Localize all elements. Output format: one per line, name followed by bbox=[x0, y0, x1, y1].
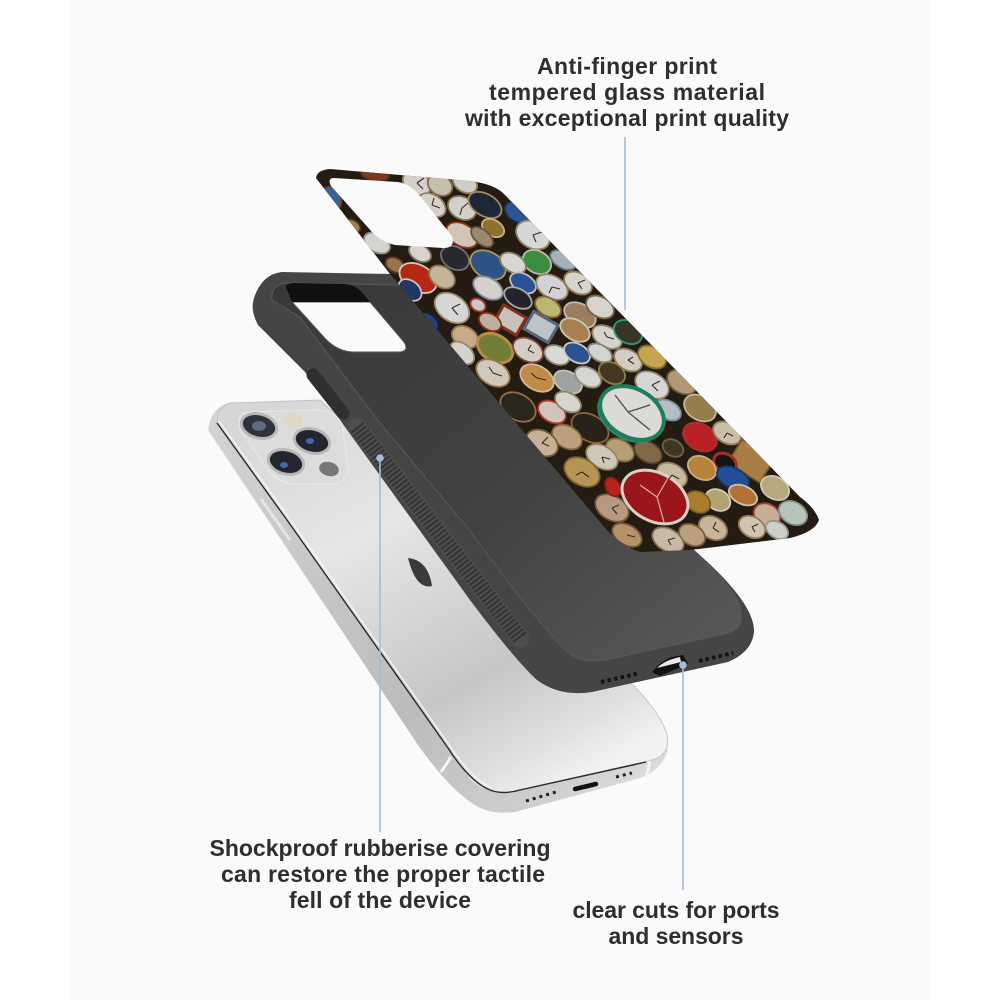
camera bump bbox=[239, 410, 348, 484]
sensor bbox=[318, 460, 340, 478]
case speaker holes right bbox=[699, 653, 733, 661]
flash bbox=[282, 411, 304, 429]
text: shockproof covering: can restore the proper tactile bbox=[221, 861, 545, 887]
text: clear cuts bbox=[572, 897, 780, 949]
case outer body bbox=[253, 272, 754, 693]
case port cutout bbox=[652, 655, 688, 676]
text: glass material bbox=[464, 53, 789, 131]
rubber grip ribs bbox=[357, 427, 520, 638]
lens 3 bbox=[266, 446, 306, 478]
glass base bbox=[316, 169, 819, 552]
side button bbox=[261, 499, 290, 540]
phone speaker holes right bbox=[616, 773, 632, 777]
text: shockproof covering: fell of the device bbox=[289, 887, 471, 913]
lens 2 bbox=[292, 425, 332, 457]
camera cutout inner wall bbox=[286, 283, 370, 302]
text: shockproof covering: Shockproof rubberise covering bbox=[210, 835, 550, 861]
text: glass material: with exceptional print quality bbox=[464, 105, 789, 131]
apple logo bbox=[408, 558, 432, 586]
phone rim highlight bbox=[219, 421, 492, 788]
case speaker holes left bbox=[601, 673, 640, 682]
phone speaker holes bbox=[526, 792, 556, 801]
text: glass material: tempered glass material bbox=[489, 79, 765, 105]
text: shockproof covering bbox=[210, 835, 550, 913]
phone side frame bbox=[208, 402, 668, 813]
phone port bbox=[575, 784, 596, 789]
callout: rubber grip leader bbox=[376, 454, 384, 832]
case back plate bbox=[272, 283, 741, 661]
lens 1 bbox=[239, 410, 279, 442]
tempered glass with clock print bbox=[316, 165, 819, 558]
callout: port cuts leader bbox=[679, 661, 687, 890]
text: glass material: Anti-finger print bbox=[537, 53, 717, 79]
phone: silver iPhone back bbox=[208, 400, 668, 813]
glass camera cutout bbox=[330, 178, 453, 248]
phone case bbox=[253, 272, 754, 693]
volume button bbox=[313, 375, 343, 413]
port light bbox=[657, 657, 681, 668]
text: clear cuts: clear cuts for ports bbox=[572, 897, 780, 923]
phone edge line bbox=[217, 423, 646, 792]
phone back surface bbox=[217, 400, 668, 792]
rubber grip base bbox=[357, 427, 520, 638]
antenna bands bbox=[441, 757, 650, 778]
text: clear cuts: and sensors bbox=[608, 923, 744, 949]
clock pattern bbox=[319, 165, 811, 558]
callout: glass leader line bbox=[624, 137, 626, 310]
